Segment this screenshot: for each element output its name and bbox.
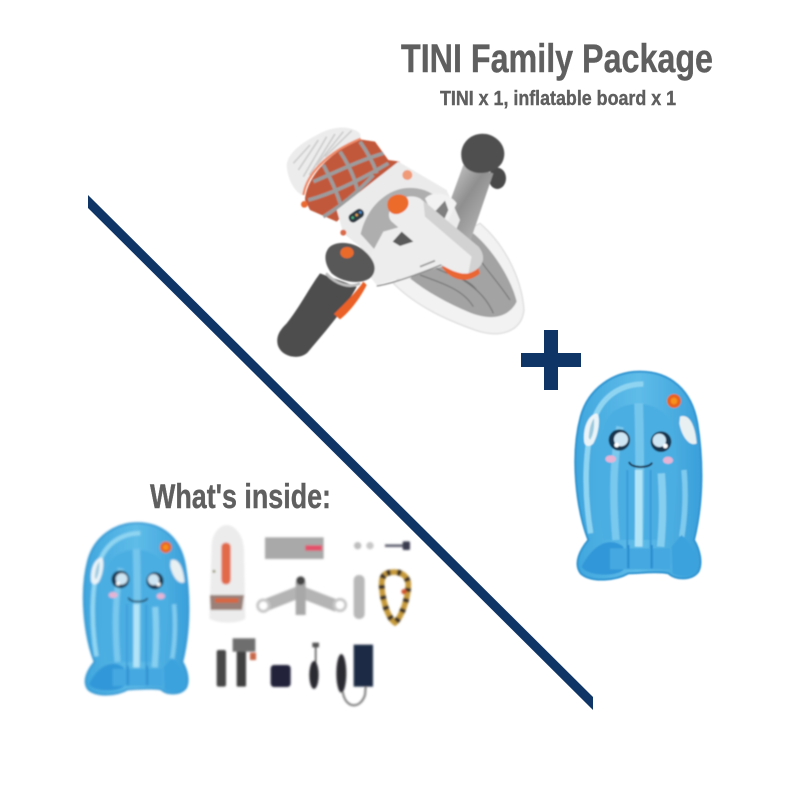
propeller cage: [301, 139, 400, 222]
item: scooter shell: [209, 525, 245, 623]
title: TINI Family Package: [401, 37, 713, 81]
subtitle: TINI x 1, inflatable board x 1: [440, 88, 676, 110]
front grip handle: [277, 243, 375, 357]
propeller drum: [287, 128, 361, 195]
scooter body: [337, 162, 460, 286]
item: lanyard: [382, 572, 408, 623]
item: bracket: [258, 576, 346, 615]
item: battery: [265, 537, 324, 559]
diagonal divider line: [88, 195, 593, 710]
heading: what's inside: What's inside:: [150, 478, 331, 516]
scooter board: [393, 223, 524, 334]
item: charger cube: [271, 665, 291, 687]
rear handle: [443, 134, 506, 240]
illustration: TINI sea scooter: [277, 128, 524, 357]
item: grip parts: [217, 638, 256, 687]
package contents: [209, 525, 410, 705]
item: small plate: [354, 575, 365, 619]
item: power adapter: [336, 645, 373, 705]
plus sign: [521, 330, 581, 390]
illustration: inflatable board in package contents: [84, 523, 189, 695]
folding arm with orange buttons: [387, 195, 483, 280]
item: cable: [309, 643, 319, 689]
illustration: inflatable board: [575, 372, 701, 580]
item: screws: [354, 541, 410, 550]
